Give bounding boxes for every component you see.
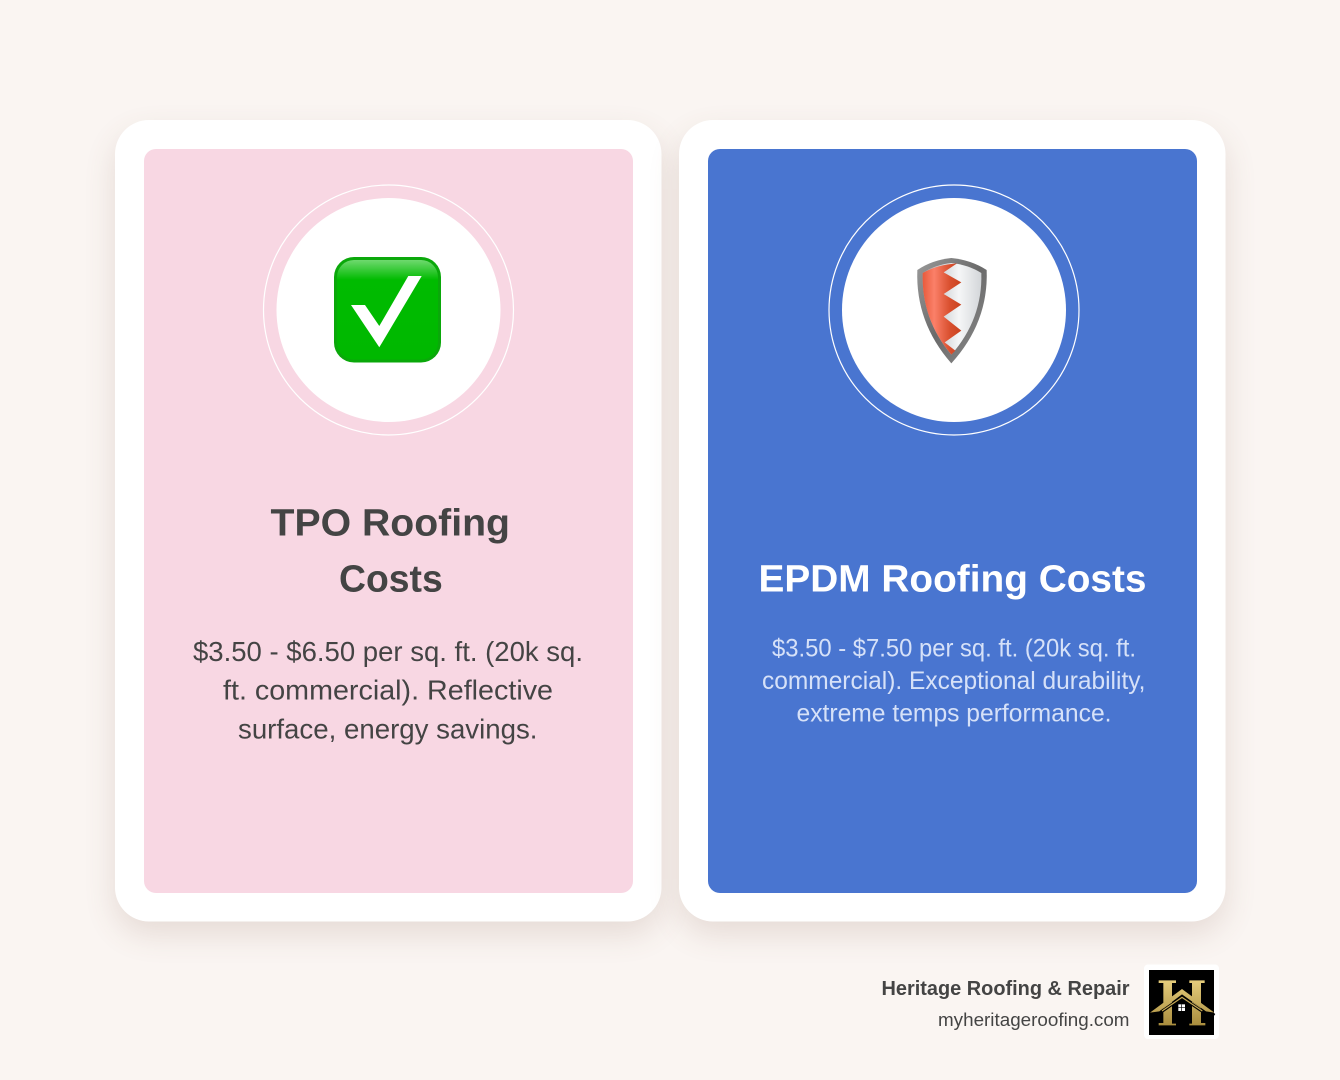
icon: shield	[829, 185, 1079, 435]
heading: EPDM Roofing Costs: EPDM Roofing Costs	[758, 559, 1146, 601]
text block: TPO description	[193, 636, 583, 744]
panel: EPDM roofing costs	[679, 120, 1226, 934]
footer: company name and website: Heritage Roofing & Repair	[882, 978, 1130, 1000]
icon: green check mark	[264, 185, 514, 435]
footer: company name and website: myheritageroofing.com	[938, 1010, 1130, 1030]
panel: TPO roofing costs	[115, 120, 662, 934]
text block: EPDM description: extreme temps performance.	[796, 700, 1112, 728]
text block: TPO description: $3.50 - $6.50 per sq. ft. (20k sq.	[193, 636, 583, 667]
icon: Heritage Roofing logo	[1144, 964, 1219, 1039]
heading: TPO Roofing Costs: Costs	[339, 559, 443, 601]
heading: TPO Roofing Costs: TPO Roofing	[270, 502, 510, 544]
text block: TPO description: ft. commercial). Reflective	[223, 675, 553, 706]
text block: EPDM description: commercial). Exceptional durability,	[762, 667, 1146, 695]
footer: company name and website	[882, 978, 1130, 1030]
text block: EPDM description	[762, 635, 1146, 728]
text block: EPDM description: $3.50 - $7.50 per sq. ft. (20k sq. ft.	[772, 635, 1136, 663]
heading: TPO Roofing Costs	[270, 502, 510, 601]
text block: TPO description: surface, energy savings.	[238, 713, 538, 744]
